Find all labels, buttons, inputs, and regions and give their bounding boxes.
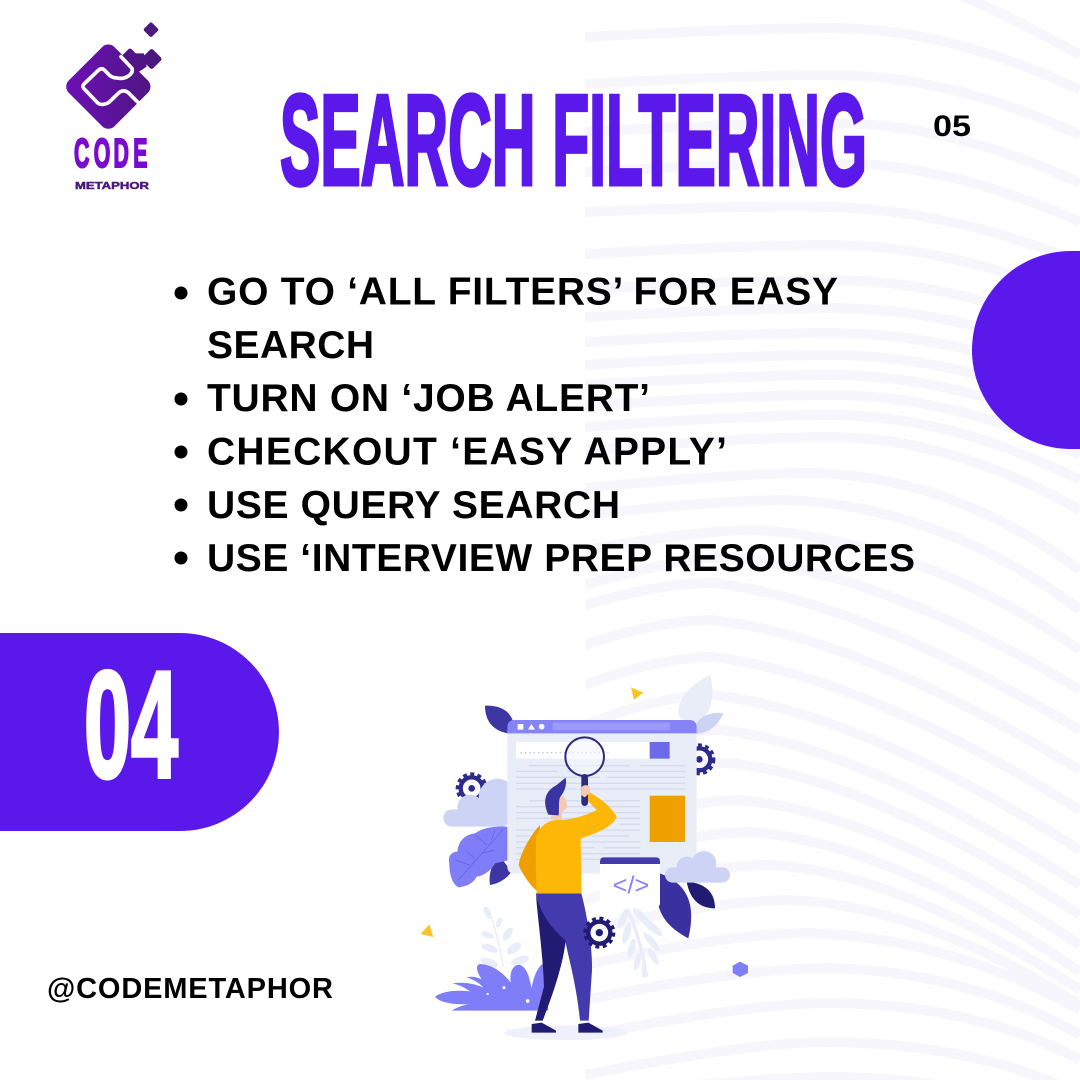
decorative half circle: [972, 251, 1080, 449]
browser window: [507, 720, 697, 873]
step number: 04: [84, 640, 178, 810]
yellow triangles: [421, 687, 643, 937]
bullet list: [174, 270, 915, 580]
bullet 1: GO TO ‘ALL FILTERS’ FOR EASY: [207, 270, 838, 314]
code card: [600, 857, 660, 907]
bullet 1: [174, 270, 838, 367]
left purple leaf: [449, 827, 510, 887]
front gear: [585, 918, 614, 947]
right cloud: [665, 851, 730, 883]
background leaves: [485, 675, 723, 938]
logo: Code Metaphor: [63, 22, 162, 192]
logo word: CODE: CODE: [74, 129, 148, 176]
person: [519, 778, 617, 1033]
pale plant: [479, 905, 530, 970]
hexagon: [733, 962, 748, 977]
logo word: METAPHOR: METAPHOR: [75, 180, 150, 192]
bullet 3: CHECKOUT ‘EASY APPLY’: [207, 430, 727, 474]
handle: @CODEMETAPHOR: [47, 973, 333, 1005]
left cloud: [443, 779, 516, 827]
bullet 1: SEARCH: [207, 324, 374, 367]
ground shadow: [504, 1025, 628, 1040]
logo mark: [63, 22, 162, 132]
page number: 05: [933, 110, 971, 143]
code card: </>: [613, 871, 649, 899]
bullet 2: TURN ON ‘JOB ALERT’: [207, 377, 650, 420]
purple bush: [435, 963, 548, 1011]
illustration: person searching a web page with a magnifier: [421, 675, 748, 1040]
magnifying glass: [565, 737, 604, 803]
step number pill: [0, 633, 279, 831]
bullet 5: USE ‘INTERVIEW PREP RESOURCES: [207, 537, 915, 580]
pale fern: [616, 906, 665, 978]
gears behind window: [457, 745, 714, 803]
bullet 4: USE QUERY SEARCH: [207, 484, 620, 527]
